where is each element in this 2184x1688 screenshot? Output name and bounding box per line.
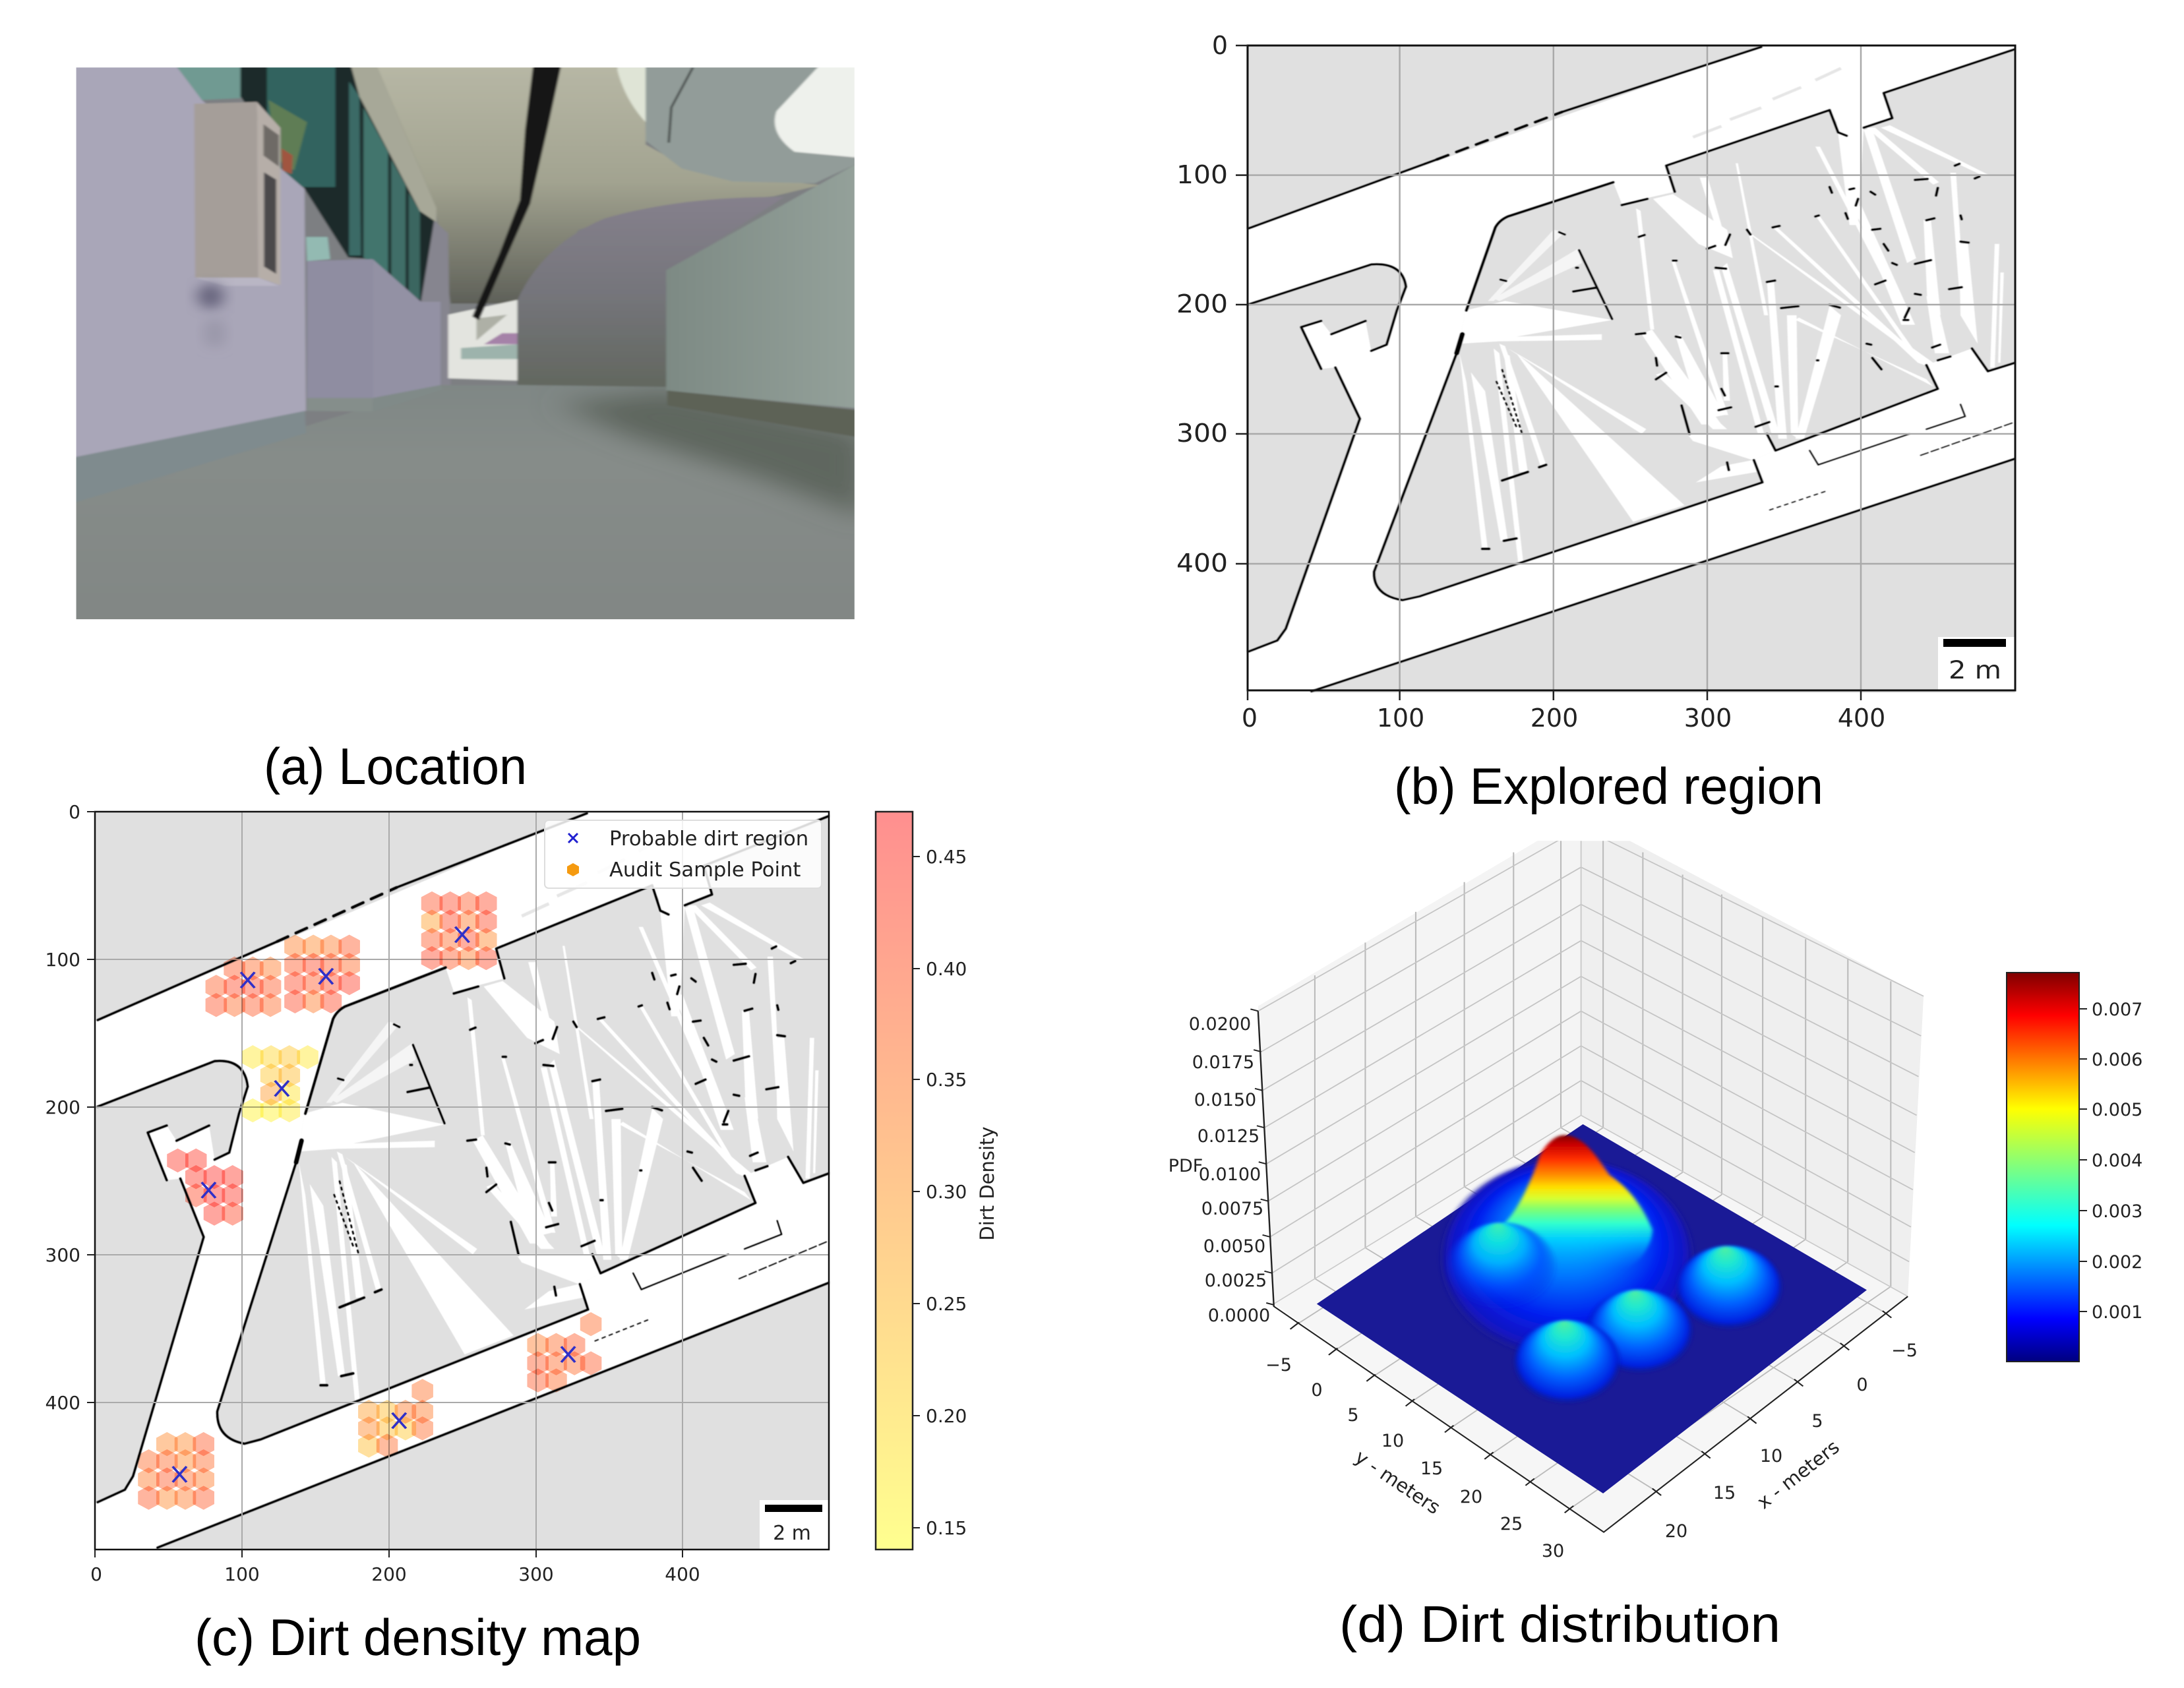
jet colorbar (2007, 973, 2142, 1362)
cluster top right (421, 891, 497, 970)
y axis labels c: 200 (46, 1097, 80, 1118)
caption c: (c) Dirt density map (195, 1608, 641, 1666)
z axis labels: 0.0125 (1198, 1126, 1259, 1147)
x axis labels d: 15 (1713, 1483, 1736, 1503)
surface bump front (1513, 1320, 1622, 1405)
density colorbar: 0.20 (926, 1405, 967, 1427)
density colorbar: 0.30 (926, 1181, 967, 1203)
surface base (1317, 1124, 1867, 1493)
cluster lower centre right (527, 1312, 601, 1393)
panel a: location photo (66, 59, 866, 629)
panel c: dirt density map (46, 801, 998, 1585)
photo: floor shadow (559, 390, 866, 518)
z axis labels: 0.0175 (1192, 1052, 1254, 1073)
jet colorbar: 0.005 (2092, 1100, 2142, 1120)
scale bar b: 2 m (1949, 656, 2001, 684)
legend c: Probable dirt region (609, 828, 808, 851)
cluster upper centre (284, 934, 360, 1013)
surface peak (1496, 1135, 1653, 1269)
photo: low wall front (307, 259, 373, 402)
z axis labels: 0.0050 (1203, 1236, 1265, 1257)
density colorbar: 0.15 (926, 1517, 967, 1539)
y axis labels d: 15 (1420, 1459, 1443, 1479)
gridlines b (1248, 45, 2015, 690)
z axis labels: 0.0025 (1205, 1271, 1267, 1291)
scale bar c (760, 1500, 829, 1550)
z axis labels: 0.0100 (1199, 1164, 1261, 1185)
photo: overhead structure (645, 67, 855, 183)
y axis labels d: 5 (1347, 1405, 1359, 1426)
y axis labels b: 0 (1212, 31, 1228, 60)
photo: wall box side (194, 102, 258, 278)
z axis labels: 0.0150 (1194, 1090, 1256, 1110)
photo: windows (241, 59, 437, 302)
x axis labels d: −5 (1891, 1341, 1918, 1361)
photo: right skirting (667, 390, 866, 438)
y axis labels c: 100 (46, 949, 80, 971)
x axis labels c (90, 1563, 700, 1585)
x axis labels b: 0 (1242, 704, 1258, 733)
x axis labels c: 400 (665, 1563, 700, 1585)
z axis title: PDF (1168, 1156, 1203, 1176)
x axis labels b: 200 (1531, 704, 1578, 733)
x axis labels d: 0 (1856, 1375, 1868, 1395)
density colorbar: 0.40 (926, 958, 967, 980)
legend c (545, 820, 822, 888)
jet colorbar: 0.003 (2092, 1201, 2142, 1222)
z axis labels: 0.0000 (1208, 1306, 1270, 1326)
jet colorbar: 0.004 (2092, 1151, 2142, 1171)
photo: wall box front (257, 102, 280, 285)
map b (1246, 45, 2015, 693)
z axis labels (1189, 1014, 1270, 1326)
y axis labels b: 300 (1176, 419, 1228, 448)
z axis labels: 0.0200 (1189, 1014, 1251, 1035)
jet colorbar: 0.002 (2092, 1252, 2142, 1273)
z axis labels: 0.0075 (1201, 1199, 1263, 1219)
legend c: Audit Sample Point (609, 859, 801, 882)
surface left shoulder (1444, 1222, 1558, 1311)
photo: skylight (773, 67, 855, 158)
cluster bottom left (138, 1432, 214, 1510)
y axis labels c (46, 801, 80, 1414)
y axis labels d (1265, 1355, 1564, 1561)
photo: ceiling (374, 59, 820, 303)
probable dirt region markers (173, 927, 575, 1482)
cluster upper left (206, 957, 281, 1017)
y axis labels c: 400 (46, 1392, 80, 1414)
y axis labels d: 20 (1460, 1487, 1482, 1507)
x axis labels b (1242, 704, 1885, 733)
x axis labels d: 5 (1811, 1411, 1823, 1432)
y axis labels b: 400 (1176, 549, 1228, 578)
x axis labels c: 0 (90, 1563, 102, 1585)
density colorbar: 0.25 (926, 1293, 967, 1315)
density colorbar: Dirt Density (976, 1126, 998, 1241)
cluster yellow (242, 1045, 318, 1122)
jet colorbar: 0.006 (2092, 1050, 2142, 1070)
x axis title d: x - meters (1753, 1435, 1844, 1513)
x axis labels c: 300 (518, 1563, 554, 1585)
cluster red (167, 1149, 243, 1226)
caption a: (a) Location (264, 737, 527, 795)
scale bar c: 2 m (773, 1522, 811, 1545)
panel d: 3D dirt distribution (1168, 815, 2142, 1561)
x axis labels d: 10 (1760, 1446, 1782, 1466)
photo: left skirting (76, 413, 305, 500)
tick marks b (1236, 45, 1861, 700)
caption d: (d) Dirt distribution (1339, 1595, 1780, 1653)
photo: plant (268, 100, 307, 170)
y axis labels d: 30 (1542, 1541, 1564, 1561)
x axis labels c: 200 (371, 1563, 407, 1585)
photo: corridor end (448, 300, 518, 380)
density colorbar (876, 812, 998, 1550)
x axis labels d (1665, 1341, 1918, 1542)
y axis labels b: 200 (1176, 289, 1228, 318)
cluster bottom centre (358, 1379, 433, 1458)
x axis labels b: 100 (1377, 704, 1424, 733)
surface bump right (1675, 1246, 1784, 1331)
surface bump centre (1585, 1289, 1694, 1374)
surface central dome (1438, 1157, 1697, 1361)
photo: ceiling beam (472, 59, 562, 320)
caption b: (b) Explored region (1394, 757, 1823, 815)
y axis labels b (1176, 31, 1228, 578)
x axis labels d: 20 (1665, 1521, 1687, 1542)
tick marks c (87, 812, 682, 1557)
y axis labels c: 300 (46, 1244, 80, 1266)
photo: corridor side wall (421, 222, 450, 385)
y axis labels d: −5 (1265, 1355, 1292, 1375)
y axis labels d: 10 (1381, 1431, 1404, 1451)
audit sample hexagons (138, 891, 601, 1510)
scale bar b (1938, 637, 2015, 690)
x axis labels b: 300 (1684, 704, 1732, 733)
density colorbar: 0.45 (926, 846, 967, 868)
gridlines c (95, 812, 829, 1550)
photo: box shadow (197, 284, 224, 309)
y axis title d: y - meters (1351, 1445, 1445, 1519)
jet colorbar: 0.007 (2092, 1000, 2142, 1020)
photo: left wall (66, 59, 306, 459)
y axis labels d: 0 (1311, 1380, 1323, 1401)
jet colorbar: 0.001 (2092, 1302, 2142, 1323)
3d tick marks (1250, 1009, 1891, 1513)
map c (95, 812, 830, 1550)
density colorbar: 0.35 (926, 1069, 967, 1091)
x axis labels c: 100 (224, 1563, 260, 1585)
photo: distant awning (484, 333, 518, 344)
y axis labels c: 0 (69, 801, 80, 823)
photo: base tone (201, 96, 855, 427)
photo: curved wall (518, 197, 784, 387)
photo: floor (76, 388, 855, 592)
y axis labels d: 25 (1500, 1514, 1523, 1534)
x axis labels b: 400 (1838, 704, 1885, 733)
photo: right wall (666, 165, 866, 409)
panel b: explored region map (1176, 31, 2015, 733)
3d axes (1258, 1011, 1908, 1532)
y axis labels b: 100 (1176, 160, 1228, 189)
3d panes (1258, 815, 1924, 1532)
